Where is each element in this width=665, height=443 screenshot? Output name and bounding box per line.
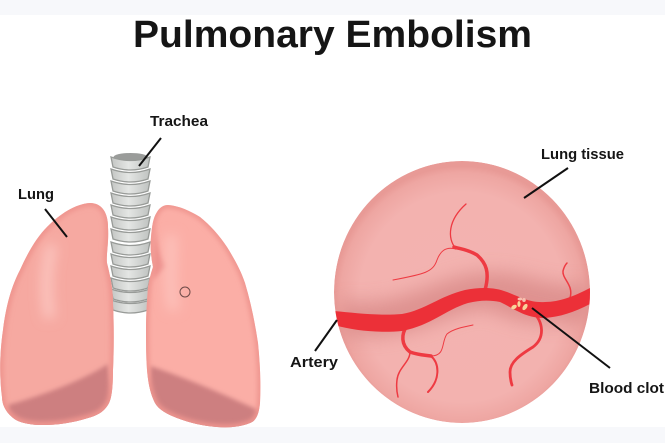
right lung: [144, 200, 264, 432]
label: lung: Lung: [18, 186, 54, 203]
artery branches: [393, 204, 571, 397]
title: Pulmonary Embolism: [133, 14, 532, 56]
label: artery: Artery: [290, 354, 339, 371]
leader line: artery: [315, 320, 337, 351]
artery: [334, 287, 592, 332]
leader line: lung tissue: [524, 168, 568, 198]
label: lung tissue: Lung tissue: [541, 146, 624, 163]
icon: trachea: [111, 153, 150, 313]
leader line: blood clot: [532, 308, 610, 368]
label: trachea: Trachea: [150, 113, 209, 130]
leader line: lung: [45, 209, 67, 237]
icon: small marker circle on lung: [180, 287, 190, 297]
label: blood clot: Blood clot: [589, 380, 664, 397]
left lung: [0, 200, 118, 430]
blood clot: [511, 298, 528, 310]
leader line: trachea: [139, 138, 161, 166]
magnified lung tissue: [334, 161, 592, 423]
